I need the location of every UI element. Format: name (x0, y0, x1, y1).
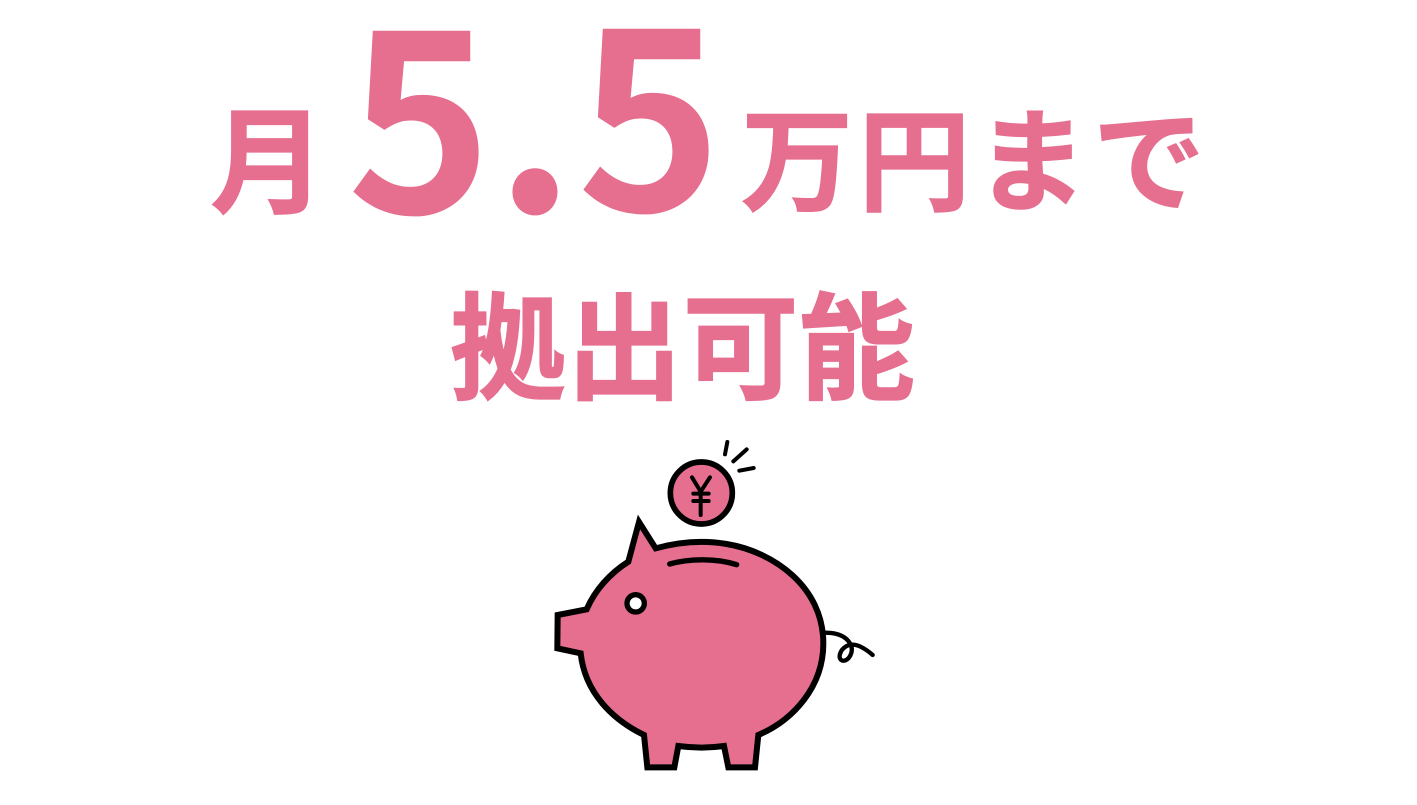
heading line 1: monthly limit: 万円まで (741, 73, 1205, 235)
pig tail (825, 633, 873, 661)
pig eye (627, 595, 644, 612)
sparkle lines (725, 442, 754, 471)
pig body (557, 522, 823, 767)
coin (670, 462, 732, 524)
heading line 1: monthly limit: 月 (210, 70, 326, 238)
heading line 1: monthly limit (210, 0, 1205, 284)
icon: piggy bank with coin (557, 442, 873, 767)
coin slot (670, 560, 737, 565)
heading line 2: contribution possible: 拠出可能 (450, 256, 915, 424)
yen sign (692, 477, 710, 515)
